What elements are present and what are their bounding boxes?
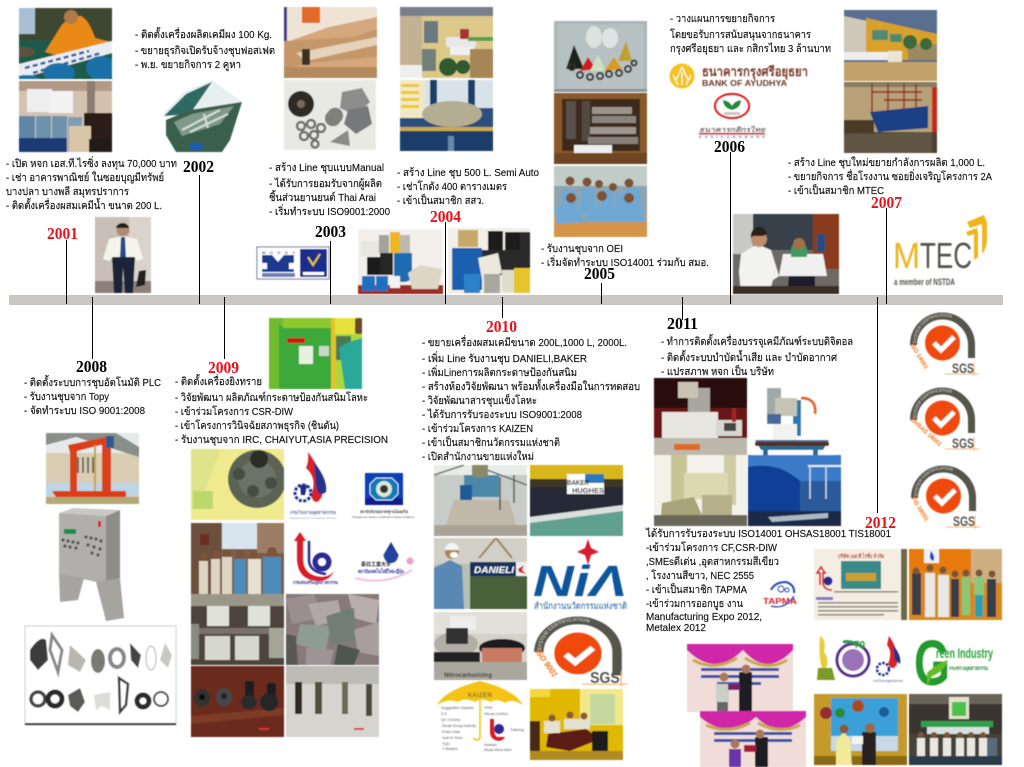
photo: NEC award ceremony two — [700, 711, 806, 767]
milestone 2002 — [135, 27, 275, 176]
logo: TAPMA: TAPMA — [763, 597, 797, 606]
photo: staff in meeting room — [190, 522, 285, 595]
photo: Danieli worker: DANIELI — [474, 565, 514, 576]
logo: Management System Certification Institute: Management System Certification Institute (Thailand) — [352, 515, 414, 519]
logo: National Innovation Agency — [533, 539, 627, 612]
milestone 2001 — [6, 156, 177, 243]
diagram: Kaizen umbrella: Poka-Yoke — [442, 730, 460, 734]
photo: scrubber towers — [653, 454, 748, 527]
photo: company brochure page — [814, 548, 908, 621]
photo: lab glassware — [553, 20, 648, 93]
logo: Department of Industrial Works: Department of Industrial Works — [290, 516, 336, 520]
milestone 2010: - เข้าเป็นสมาชิกนวัตกรรมแห่งชาติ — [422, 435, 560, 449]
photo: drums and bags — [448, 228, 531, 294]
logo: MTEC: a member of NSTDA — [894, 277, 955, 287]
milestone 2009: - วิจัยพัฒนา ผลิตภัณฑ์กระดาษป้องกันสนิมโลหะ — [175, 391, 368, 404]
milestone 2010: - เข้าร่วมโครงการ KAIZEN — [422, 422, 533, 435]
milestone 2010: - วิจัยพัฒนาสารชุบแข็งโลหะ — [422, 393, 537, 407]
diagram: Kaizen umbrella: Small Group Activity — [442, 724, 476, 728]
logo: Kasikornbank — [699, 94, 766, 139]
milestone 2012: ได้รับการรับรองระบบ ISO14001 OHSAS18001 TIS18001 — [645, 527, 891, 540]
photo: award presentation on stage — [814, 694, 907, 765]
photo: chemical containers — [357, 229, 444, 295]
photo: coated pins — [286, 666, 380, 738]
milestone 2009: - เข้าโครงการวินิจฉัยสภาพธุรกิจ (ชินดัน) — [175, 419, 339, 432]
milestone 2009: - รับงานชุบจาก IRC, CHAIYUT,ASIA PRECISION — [175, 434, 388, 446]
photo: nitrocarburizing furnace — [433, 612, 528, 681]
diagram: Kaizen umbrella: Just In Time — [442, 736, 462, 740]
milestone 2011: - ติดตั้งระบบบำบัดน้ำเสีย และ บำบัดอากาศ — [661, 350, 837, 364]
milestone 2012: Metalex 2012 — [646, 622, 706, 634]
milestone 2010: 2010 — [486, 317, 517, 336]
milestone 2005 — [541, 243, 709, 283]
milestone 2012: -เข้าร่วมโครงการ CF,CSR-DIW — [646, 541, 777, 554]
logo: Green Industry — [914, 627, 993, 699]
logo: 70th anniversary trophy and ministry seal: กรมโรงงานอุตสาหกรรม — [873, 678, 903, 684]
logo: SGS OHSAS 18001: SYSTEM CERTIFICATION — [912, 388, 952, 418]
photo: steel tubes in crate — [553, 92, 648, 165]
milestone 2009: - เข้าร่วมโครงการ CSR-DIW — [175, 405, 293, 418]
logo: Department of Industrial Works: กรมโรงงานอุตสาหกรรม — [290, 509, 336, 516]
diagram: Kaizen umbrella: TQC — [442, 742, 450, 746]
logo: TAPMA — [763, 582, 797, 607]
logo: 70th anniversary trophy and ministry seal: 70 — [854, 640, 866, 651]
photo: painted plates in trays — [190, 593, 285, 666]
milestone 2010: - เพิ่มLineการผลิตกระดาษป้องกันสนิม — [422, 365, 577, 379]
milestone 2003: - เริ่มทำระบบ ISO9001:2000 — [269, 204, 390, 218]
logo: SGS ISO 9001 large: SGS — [590, 669, 620, 687]
photo: NEC award ceremony one — [686, 643, 794, 713]
milestone 2012: - เข้าเป็นสมาชิก TAPMA — [646, 582, 747, 596]
milestone 2008 — [24, 357, 161, 417]
milestone 2007: 2007 — [871, 193, 902, 212]
logo: National Innovation Agency: สำนักงานนวัตกรรมแห่งชาติ — [534, 601, 627, 612]
milestone 2007: - สร้าง Line ชุบใหม่ขยายกำลังการผลิต 1,000 L. — [788, 156, 985, 169]
logo: SGS TIS 18001: SGS — [953, 513, 975, 529]
photo: staff group — [553, 166, 648, 238]
logo: Moody and UKAS certification: MOODY — [262, 250, 295, 255]
milestone 2010: - เปิดสำนักงานขายแห่งใหม่ — [422, 450, 534, 463]
milestone 2006: โดยขอรับการสนับสนุนจากธนาคาร — [670, 28, 811, 41]
logo: Management System Certification Institute: สถาบันรับรองมาตรฐานไอเอสโอ — [360, 509, 409, 515]
milestone 2005: 2005 — [584, 264, 615, 283]
photo: plating line interior — [843, 81, 938, 154]
logo: SGS ISO 14001: SYSTEM CERTIFICATION — [912, 312, 952, 344]
photo: plating line — [399, 79, 494, 152]
diagram: Kaizen umbrella: TPM — [484, 706, 492, 710]
photo: Baker Hughes tank: BAKER — [567, 478, 589, 487]
milestone 2008: - รับงานชุบจาก Topy — [24, 391, 110, 403]
diagram: Kaizen umbrella: Kanban — [484, 743, 497, 747]
photo: exhibition booth team — [909, 694, 1002, 765]
milestone 2004: - เข้าเป็นสมาชิก สสว. — [397, 193, 484, 207]
diagram: Kaizen umbrella: QC Circles/ — [441, 718, 461, 722]
milestone 2004: - เช่าโกดัง 400 ตารางเมตร — [397, 180, 507, 193]
diagram: Kaizen umbrella — [437, 681, 524, 752]
milestone 2009: - ติดตั้งเครื่องยิงทราย — [175, 374, 262, 388]
milestone 2002: - พ.ย. ขยายกิจการ 2 คูหา — [135, 59, 241, 71]
logo: Department of Industrial Promotion: กรมส่งเสริมอุตสาหกรรม — [293, 579, 338, 586]
logo: Thai Nichi Institute of Technology: 泰日工業大学 — [361, 561, 391, 568]
milestone 2010: - ได้รับการรับรองระบบ ISO9001:2008 — [422, 408, 582, 421]
photo: stamped metal parts catalog — [25, 626, 176, 725]
milestone 2005: - รับงานชุบจาก OEI — [541, 243, 623, 255]
logo: SGS OHSAS 18001 — [909, 386, 980, 452]
milestone 2011: - แปรสภาพ หจก เป็น บริษัท — [661, 364, 774, 378]
photo: office meeting — [732, 213, 840, 295]
milestone 2010: - ขยายเครื่องผสมเคมีขนาด 200L,1000 L, 2000L. — [422, 335, 627, 349]
logo: Management System Certification Institute — [352, 473, 414, 519]
diagram: Kaizen umbrella: KAIZEN — [468, 693, 492, 699]
milestone 2010: - เพิ่ม Line รับงานชุบ DANIELI,BAKER — [422, 351, 587, 365]
photo: Baker Hughes tank: HUGHES — [572, 486, 604, 495]
milestone 2002: - ติดตั้งเครื่องผลิตเคมีผง 100 Kg. — [135, 27, 272, 41]
logo: SGS OHSAS 18001: SGS — [952, 435, 974, 451]
logo: Kasikornbank: ธนาคารกสิกรไทย — [699, 125, 766, 134]
milestone 2012: , โรงงานสีขาว, NEC 2555 — [646, 569, 754, 582]
photo: machined part top — [283, 6, 378, 79]
logo: MTEC — [893, 215, 987, 287]
year connector lines — [66, 152, 886, 513]
logo: SGS OHSAS 18001: OHSAS 18001 — [909, 417, 943, 448]
logo: SGS ISO 14001 — [908, 312, 980, 376]
logo: Bank of Ayudhya — [670, 64, 808, 88]
logo: SGS TIS 18001: TIS 18001 — [909, 496, 929, 523]
milestone 2001: - เปิด หจก เอส.ที.ไรซิ่ง ลงทุน 70,000 บาท — [6, 156, 177, 170]
diagram: Kaizen umbrella: Training — [510, 728, 524, 732]
milestone 2001: 2001 — [47, 224, 78, 243]
milestone 2008: 2008 — [76, 357, 107, 376]
logo: Department of Industrial Promotion — [293, 532, 338, 586]
milestone 2008: - จัดทำระบบ ISO 9001:2008 — [24, 405, 145, 417]
milestone 2009: 2009 — [208, 358, 239, 377]
milestone 2012: ,SMEsดีเด่น ,อุตสาหกรรมสีเขียว — [646, 555, 779, 568]
photo: Baker Hughes tank — [529, 464, 624, 537]
milestone 2003: - สร้าง Line ชุบแบบManual — [269, 162, 384, 174]
milestone 2011: - ทำการติดตั้งเครื่องบรรจุเคมีภัณฑ์ระบบดิจิตอล — [661, 334, 853, 348]
timeline bar — [9, 295, 1003, 305]
diagram: Kaizen umbrella: 5 S — [441, 712, 447, 716]
diagram: Kaizen umbrella: Suggestion System — [441, 706, 474, 710]
milestone 2005: - เริ่มจัดทำระบบ ISO14001 ร่วมกับ สมอ. — [541, 255, 709, 269]
logo: Green Industry: reen Industry — [936, 646, 993, 661]
photo: chemical drums — [18, 80, 113, 153]
photo: company brochure page: บริษัท เอส.ที.ไรซิ่ง จำกัด — [838, 552, 884, 560]
photo: metal parts on white — [284, 80, 376, 150]
photo: blue tank — [747, 454, 842, 527]
milestone 2004: 2004 — [430, 207, 461, 226]
photo: blue tank reactor — [433, 464, 528, 536]
milestone 2003: - ได้รับการยอมรับจากผู้ผลิต — [269, 177, 382, 190]
photo: red hoist frame — [45, 432, 140, 505]
diagram: Kaizen umbrella: 7 Wastes — [442, 747, 458, 751]
logo: SGS ISO 9001 large: ISO 9001 — [533, 648, 560, 679]
photo: packing machine on red — [653, 377, 748, 456]
milestone 2003: 2003 — [315, 222, 346, 241]
milestone 2001: - เช่า อาคารพาณิชย์ ในซอยบุญมีทรัพย์ — [6, 171, 164, 184]
milestone 2004: - สร้าง Line ชุบ 500 L. Semi Auto — [397, 167, 539, 179]
photo: nitrocarburizing furnace: Nitrocarburizing — [444, 672, 492, 679]
milestone 2002: 2002 — [183, 157, 214, 176]
logo: Thai Nichi Institute of Technology: สถาบันเทคโนโลยีไทย-ญี่ปุ่น — [358, 567, 404, 575]
photo: monk blessing — [18, 7, 113, 80]
milestone 2006 — [670, 13, 831, 156]
milestone 2007: - เข้าเป็นสมาชิก MTEC — [788, 183, 884, 197]
logo: MTEC: TEC — [920, 235, 972, 276]
photo: group in orange showroom — [908, 548, 1003, 621]
logo: Green Industry: กระทรวงอุตสาหกรรม — [949, 665, 988, 672]
logo: SGS TIS 18001: SYSTEM CERTIFICATION — [914, 466, 954, 496]
logo: Thai Nichi Institute of Technology — [355, 542, 414, 581]
logo: SGS ISO 9001 large — [533, 616, 628, 687]
milestone 2004 — [397, 167, 539, 226]
logo: Green Industry: G — [914, 627, 950, 699]
milestone 2011: 2011 — [667, 314, 698, 333]
logo: MTEC: M — [893, 235, 920, 276]
logo: SGS ISO 9001 large: SYSTEM CERTIFICATION — [536, 617, 590, 650]
photo: blue filling machine — [750, 388, 835, 456]
milestone 2006: กรุงศรีอยุธยา และ กสิกรไทย 3 ล้านบาท — [670, 42, 831, 55]
logo: Department of Industrial Works — [290, 452, 336, 520]
photo: scattered coated plates — [285, 593, 380, 666]
milestone 2007: - ขยายกิจการ ชื่อโรงงาน ซอยยิ่งเจริญโครงการ 2A — [788, 169, 992, 183]
milestone 2012: Manufacturing Expo 2012, — [646, 611, 762, 623]
photo: shot blast machine — [268, 317, 363, 390]
milestone 2007 — [788, 156, 992, 212]
milestone 2001: - ติดตั้งเครื่องผสมเคมีน้ำ ขนาด 200 L. — [6, 198, 162, 212]
logo: SGS TIS 18001 — [909, 464, 980, 530]
milestone 2011 — [661, 314, 853, 378]
logo: Kasikornbank: KASIKORNBANK — [699, 135, 765, 139]
photo: new factory exterior — [843, 9, 938, 82]
photo: control cabinet — [59, 508, 124, 621]
logo: Bank of Ayudhya: BANK OF AYUDHYA — [702, 78, 787, 88]
photo: green paper with rotor part — [190, 448, 285, 521]
photo: powder mixer — [162, 80, 242, 153]
milestone 2002: - ขยายธุรกิจเปิดรับจ้างชุบฟอสเฟต — [135, 45, 275, 57]
milestone 2006: - วางแผนการขยายกิจการ — [670, 13, 775, 25]
milestone 2010: - สร้างห้องวิจัยพัฒนา พร้อมทั้งเครื่องมือในการทดสอบ — [422, 379, 640, 393]
logo: National Innovation Agency: NiΛ — [533, 557, 627, 606]
photo: yellow meeting room — [529, 688, 624, 761]
diagram: Kaizen umbrella: Muda Mura Muri — [484, 748, 512, 752]
photo: founder portrait — [94, 216, 152, 294]
logo: 70th anniversary trophy and ministry seal — [817, 636, 903, 684]
milestone 2012 — [645, 513, 896, 634]
photo: black coated bushings — [190, 665, 285, 738]
milestone 2003 — [269, 162, 390, 241]
milestone 2012: -เข้าร่วมการออกบูธ งาน — [646, 598, 743, 610]
logo: Bank of Ayudhya: ธนาคารกรุงศรีอยุธยา — [702, 64, 808, 80]
diagram: Kaizen umbrella: Visual Control — [484, 712, 508, 716]
photo: Danieli worker — [433, 537, 528, 610]
photo: factory building — [399, 6, 494, 79]
milestone 2001: บางปลา บางพลี สมุทรปราการ — [6, 185, 129, 198]
logo: SGS ISO 14001: ISO 14001 — [908, 343, 929, 371]
milestone 2009 — [175, 358, 388, 446]
milestone 2003: ชิ้นส่วนยานยนต์ Thai Arai — [269, 190, 376, 204]
logo: Moody and UKAS certification — [257, 247, 329, 279]
milestone 2006: 2006 — [714, 137, 745, 156]
milestone 2010 — [422, 317, 640, 463]
logo: SGS ISO 14001: SGS — [952, 360, 974, 376]
milestone 2012: 2012 — [865, 513, 896, 532]
milestone 2008: - ติดตั้งระบบการชุบอัตโนมัติ PLC — [24, 375, 161, 389]
